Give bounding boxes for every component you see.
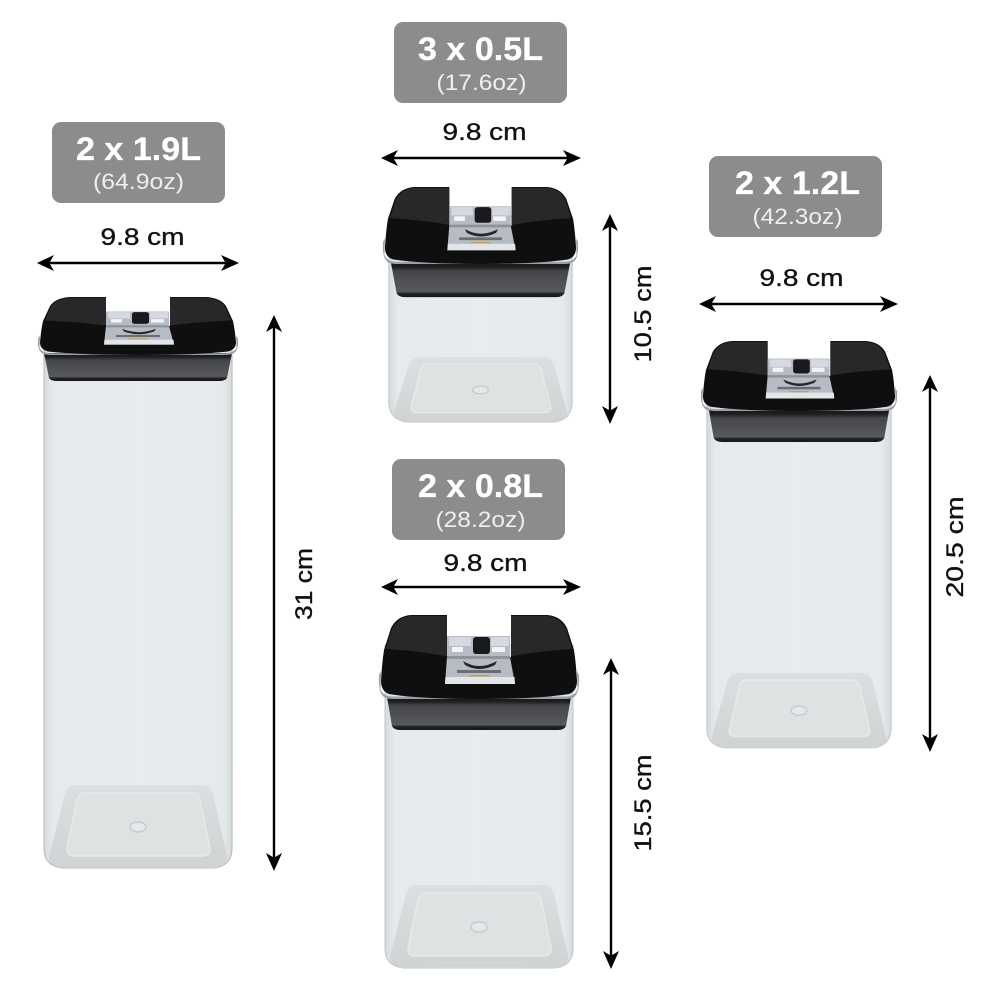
- width label 0.8L: 9.8 cm: [444, 550, 528, 577]
- width arrow 0.5L: [381, 150, 581, 166]
- badge: 2 x 0.8L: [392, 459, 565, 540]
- badge: 2 x 1.2L: 2 x 1.2L: [735, 165, 860, 201]
- jar gasket 1.2L: [709, 410, 889, 442]
- jar floor 0.8L: [390, 885, 568, 967]
- height label 10.5 cm: 10.5 cm: [630, 266, 657, 362]
- jar: 1.2L container: [701, 341, 897, 748]
- jar gasket 1.9L: [44, 353, 232, 381]
- badge: 2 x 1.9L: 2 x 1.9L: [76, 131, 201, 167]
- width arrow 1.2L: [699, 296, 898, 312]
- jar body 0.5L: [389, 216, 572, 422]
- width label 1.9L: 9.8 cm: [100, 224, 184, 251]
- badge: 2 x 1.9L: [52, 122, 225, 203]
- width label 0.5L: 9.8 cm: [442, 119, 526, 146]
- jar floor 1.2L: [712, 673, 886, 747]
- jar body 1.9L: [44, 327, 232, 868]
- height label 31 cm: 31 cm: [291, 548, 318, 620]
- badge: 3 x 0.5L: [394, 22, 567, 103]
- jar: 1.9L container: [38, 297, 238, 868]
- width arrow 1.9L: [37, 255, 239, 271]
- jar floor 1.9L: [49, 785, 227, 867]
- jar lid 0.5L: [383, 187, 578, 264]
- jar body 1.2L: [707, 370, 891, 748]
- badge: 2 x 1.2L: [709, 156, 882, 237]
- jar lid 1.2L: [701, 341, 897, 411]
- height label 20.5 cm: 20.5 cm: [942, 496, 969, 598]
- badge: 3 x 0.5L: (17.6oz): [436, 70, 526, 95]
- jar lid 1.9L: [38, 297, 238, 355]
- jar floor 0.5L: [394, 357, 567, 421]
- badge: 2 x 0.8L: 2 x 0.8L: [418, 468, 543, 504]
- jar body 0.8L: [385, 645, 573, 968]
- jar gasket 0.5L: [391, 262, 570, 297]
- width arrow 0.8L: [381, 579, 581, 595]
- height arrow 31 cm: [266, 315, 282, 871]
- jar: 0.5L container: [383, 187, 578, 422]
- jar lid 0.8L: [379, 615, 579, 699]
- width label 1.2L: 9.8 cm: [760, 265, 844, 292]
- jar: 0.8L container: [379, 615, 579, 968]
- height arrow 10.5 cm: [602, 214, 618, 424]
- badge: 2 x 1.2L: (42.3oz): [752, 204, 842, 229]
- badge: 2 x 1.9L: (64.9oz): [93, 169, 184, 194]
- jar gasket 0.8L: [387, 697, 571, 730]
- height arrow 20.5 cm: [922, 375, 938, 752]
- height arrow 15.5 cm: [603, 658, 619, 969]
- height label 15.5 cm: 15.5 cm: [630, 754, 657, 852]
- badge: 3 x 0.5L: 3 x 0.5L: [418, 31, 543, 67]
- badge: 2 x 0.8L: (28.2oz): [436, 507, 526, 532]
